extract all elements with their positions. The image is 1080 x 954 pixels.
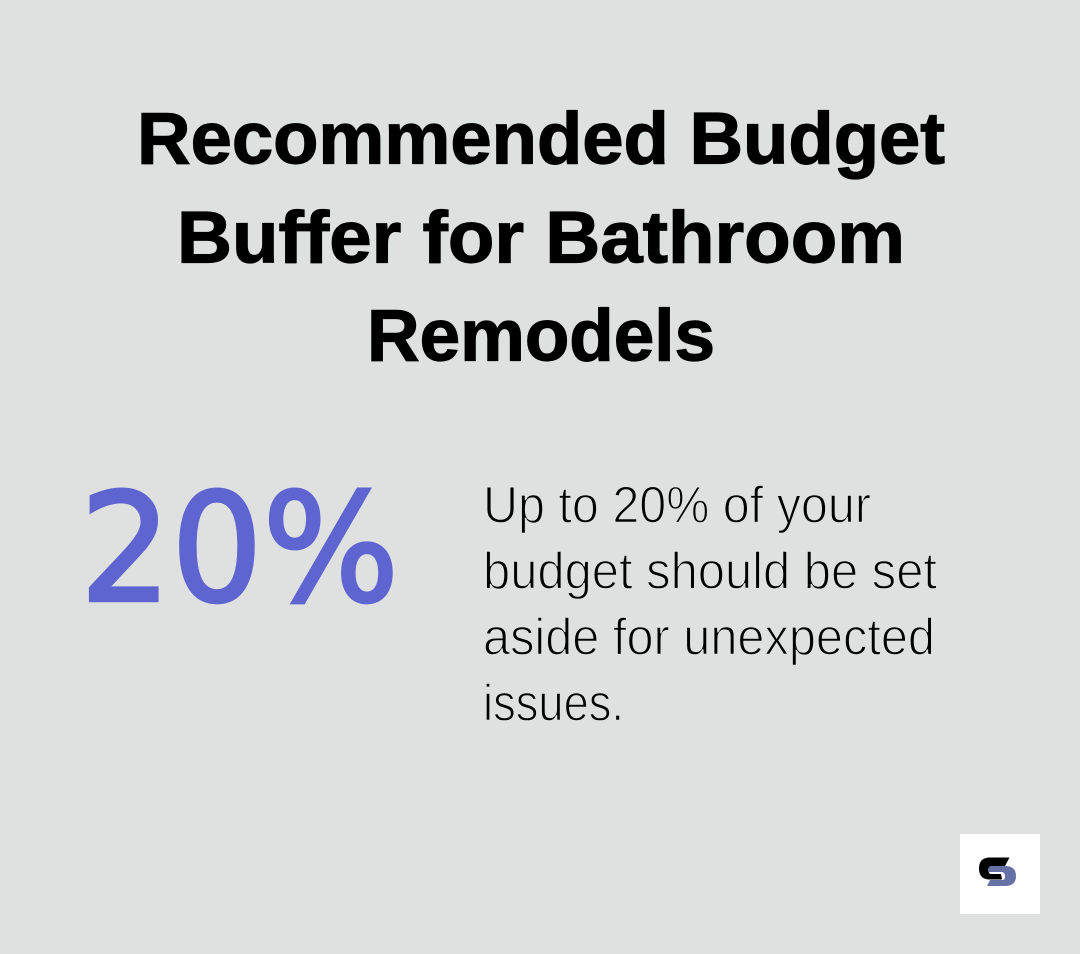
title	[137, 98, 945, 376]
description text block: budget should be set	[483, 542, 938, 600]
description text block: issues.	[483, 674, 624, 732]
title: Remodels	[367, 296, 715, 376]
logo badge	[960, 834, 1040, 914]
title: Buffer for Bathroom	[177, 198, 905, 278]
icon: logo mark, black upper half	[979, 858, 1010, 880]
description text block	[483, 476, 938, 732]
icon: logo mark, blue lower half	[987, 866, 1016, 886]
big statistic: 20%: 20%	[80, 462, 399, 636]
description text block: Up to 20% of your	[483, 476, 871, 534]
description text block: aside for unexpected	[483, 608, 935, 666]
title: Recommended Budget	[137, 98, 945, 180]
